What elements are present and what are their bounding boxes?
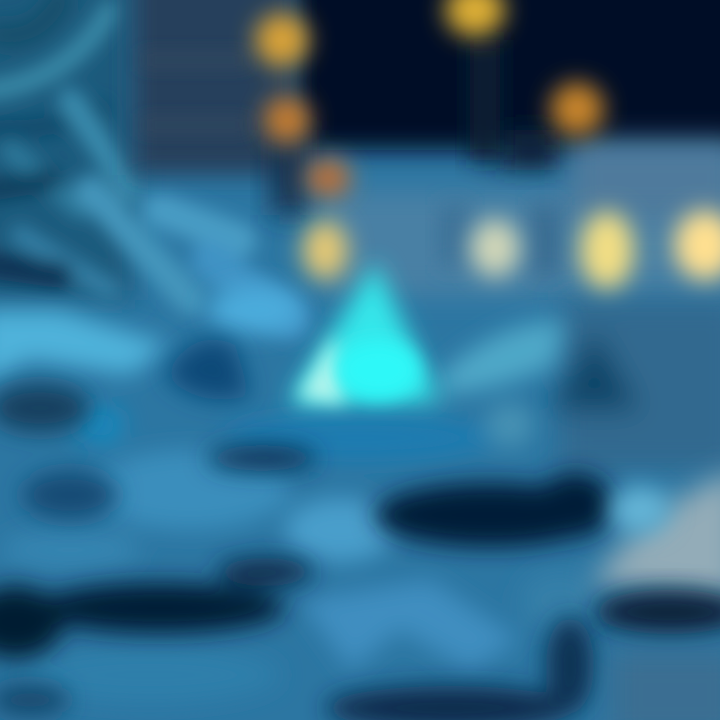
panel: water highlights around the glow: [0, 286, 600, 703]
panel: dark shadow patches in the water: [0, 339, 613, 720]
panel: pale blue building at right: [325, 40, 720, 295]
icon: lit windows: [302, 210, 720, 289]
panel: dark tower at upper centre left: [132, 0, 310, 215]
panel: lower right wall: [550, 300, 720, 470]
icon: orange lights: [255, 0, 604, 198]
panel: grey mound at lower right: [590, 470, 720, 720]
panel: teal foliage at upper left: [0, 0, 290, 320]
icon: glowing cyan triangle: [288, 262, 440, 404]
